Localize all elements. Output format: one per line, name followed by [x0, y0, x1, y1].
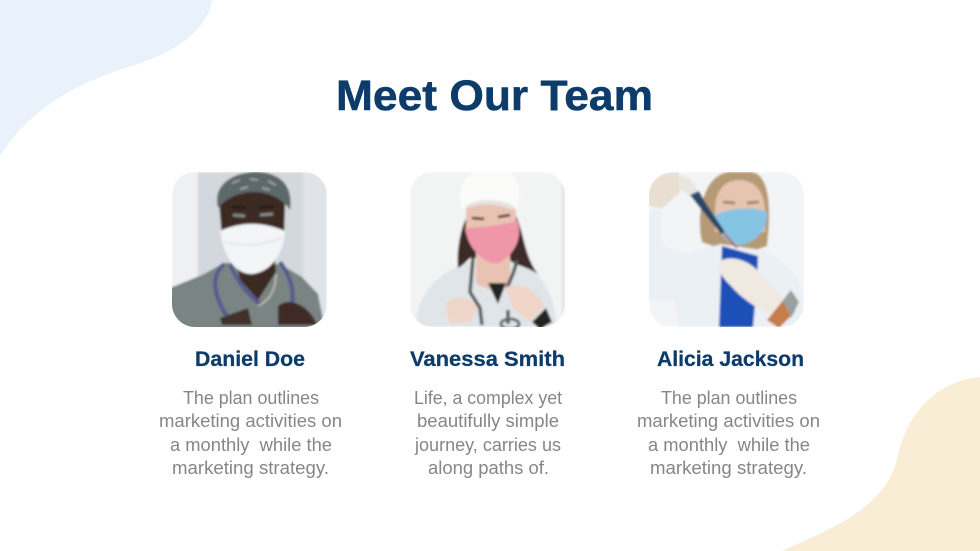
name: Vanessa Smith	[410, 348, 565, 371]
description: beautifully simple	[417, 411, 559, 431]
description: a monthly while the	[648, 435, 810, 455]
name: Daniel Doe	[195, 348, 305, 371]
photo: Alicia Jackson	[647, 172, 804, 328]
description: a monthly while the	[170, 435, 332, 455]
description: marketing strategy.	[172, 458, 329, 478]
description: Life, a complex yet	[414, 388, 562, 408]
description: journey, carries us	[414, 435, 561, 455]
name: Alicia Jackson	[657, 348, 804, 371]
description: marketing activities on	[159, 411, 342, 431]
description: marketing strategy.	[650, 458, 807, 478]
background blob: top left	[0, 0, 212, 156]
photo: Daniel Doe	[170, 172, 327, 329]
title: Meet Our Team	[336, 72, 653, 120]
panel: Alicia Jackson	[637, 172, 820, 478]
description: The plan outlines	[183, 388, 319, 408]
panel: Vanessa Smith	[410, 172, 565, 478]
description	[414, 388, 562, 478]
photo: Vanessa Smith	[410, 172, 565, 329]
description: The plan outlines	[661, 388, 797, 408]
description: marketing activities on	[637, 411, 820, 431]
background blob: bottom right	[782, 377, 980, 551]
description	[159, 388, 342, 478]
panel: Daniel Doe	[159, 172, 342, 478]
description: along paths of.	[428, 458, 549, 478]
description	[637, 388, 820, 478]
